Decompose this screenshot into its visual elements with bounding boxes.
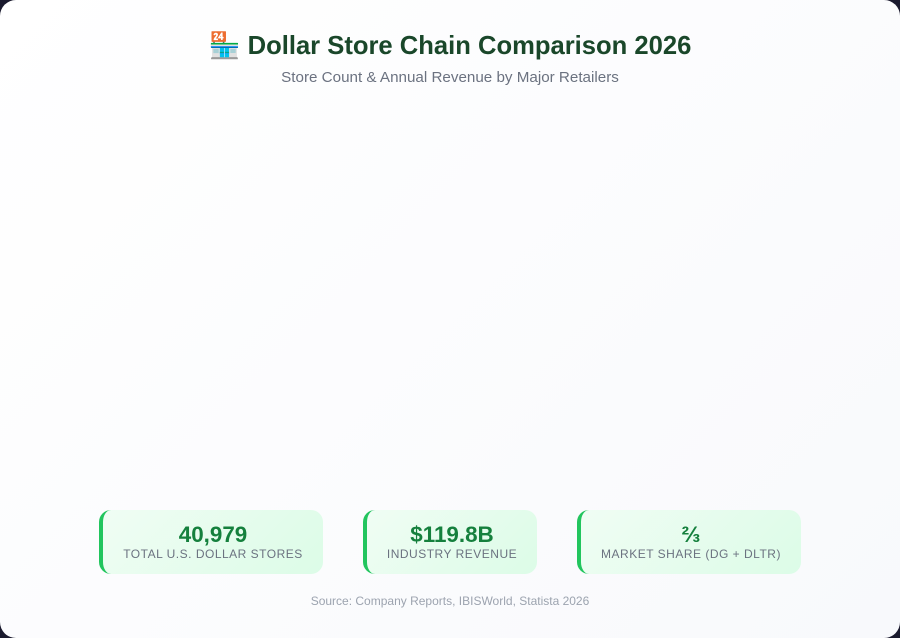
stat label: industry revenue: INDUSTRY REVENUE — [387, 547, 517, 561]
stat value: two thirds: ⅔ — [682, 522, 700, 547]
stat value: 40,979: 40,979 — [179, 522, 247, 547]
stat card: market share — [577, 510, 801, 574]
stat label: market share: MARKET SHARE (DG + DLTR) — [601, 547, 781, 561]
subtitle: Store Count & Annual Revenue by Major Retailers — [281, 69, 619, 86]
stats row — [99, 510, 801, 574]
stat value: $119.8B: $119.8B — [410, 522, 494, 547]
source note: Source: Company Reports, IBISWorld, Statista 2026 — [311, 594, 589, 608]
stat card: total stores — [99, 510, 323, 574]
title: 🏪 Dollar Store Chain Comparison 2026 — [209, 32, 691, 60]
stat card: industry revenue — [363, 510, 537, 574]
stat label: total stores: TOTAL U.S. DOLLAR STORES — [123, 547, 303, 561]
